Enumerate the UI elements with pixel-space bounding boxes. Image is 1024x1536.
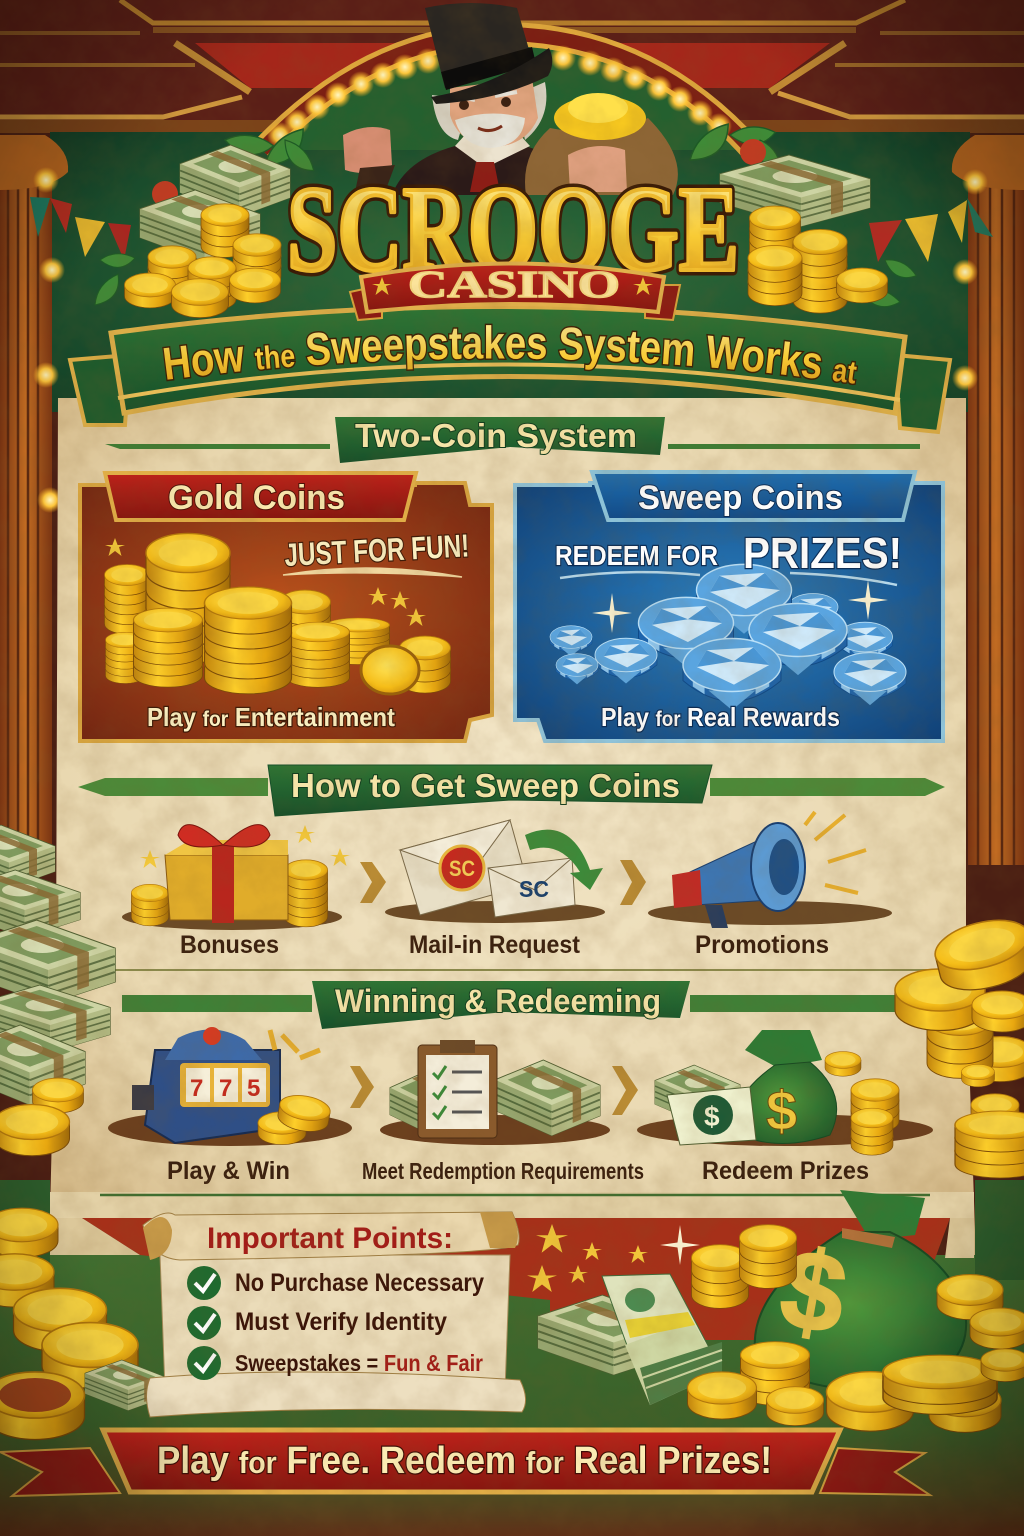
left cash pile: [0, 825, 115, 1105]
face: [450, 78, 538, 147]
right hand: [568, 146, 627, 192]
icon: megaphone: [648, 812, 892, 928]
header molding: [0, 0, 1024, 133]
icon: prize bag: $: [766, 1079, 797, 1142]
hat: [425, 3, 532, 88]
prizes text: PRIZES!: [743, 529, 902, 578]
left small coins: [0, 1078, 84, 1156]
panel: sweep coins: [515, 472, 943, 741]
sack of coins: [525, 118, 678, 195]
main heading banner: [68, 306, 952, 434]
item 2: Must Verify Identity: [235, 1308, 447, 1336]
icon: slot machine: 7: [190, 1075, 203, 1102]
check 2: [187, 1306, 221, 1340]
marquee arch: [262, 34, 752, 150]
label promotions: Promotions: [695, 931, 829, 959]
ribbon: [105, 473, 416, 520]
arrow 3: [350, 1066, 374, 1108]
icon: redemption clipboard: [380, 1040, 610, 1145]
title SCROOGE: SCROOGE: [287, 162, 739, 297]
coin piles: [104, 533, 450, 694]
red lower background: [0, 1180, 1024, 1536]
panel background: [80, 483, 492, 741]
hair: [432, 82, 546, 140]
right column: [952, 135, 1024, 865]
arrow 2: [620, 860, 646, 905]
money stack top left: [140, 145, 290, 261]
coat: [392, 146, 580, 195]
icon: slot machine: 5: [247, 1075, 260, 1102]
icon: mail-in envelopes: SC: [449, 856, 475, 881]
CASINO banner: CASINO: [408, 264, 620, 306]
icon: slot machine: [108, 1027, 352, 1146]
icon: bonuses gift: [122, 825, 350, 930]
label mail-in: Mail-in Request: [409, 931, 581, 959]
left fist: [343, 127, 392, 173]
icon: prize bag: [637, 1030, 933, 1155]
icon: mail-in envelopes: [385, 820, 605, 923]
lower right money bag: $: [772, 1225, 855, 1358]
foliage header: [88, 122, 917, 315]
panel background: [515, 483, 943, 741]
icon: prize bag: $: [704, 1101, 720, 1132]
label bonuses: Bonuses: [180, 931, 279, 959]
CASINO banner: [350, 264, 680, 320]
important points scroll: [143, 1212, 526, 1417]
coins top left: [124, 204, 281, 318]
tagline: JUST FOR FUN!: [283, 527, 470, 573]
main heading banner: How the Sweepstakes System Works at: [162, 324, 858, 386]
lower right coins: [688, 1275, 1024, 1432]
right coin pile: [895, 912, 1024, 1178]
left lower coin pile: [0, 1208, 165, 1440]
label requirements: Meet Redemption Requirements: [362, 1158, 644, 1184]
coins top right: [748, 206, 888, 313]
arrow 1: [360, 862, 386, 903]
lower coins behind bag: [692, 1225, 796, 1308]
title SCROOGE: SCROOGE: [287, 162, 739, 297]
check 3: [187, 1346, 221, 1380]
caption: Play for Entertainment: [147, 702, 395, 732]
icon: slot machine: 7: [219, 1075, 232, 1102]
label play win: Play & Win: [167, 1157, 290, 1185]
heading: Gold Coins: [168, 479, 345, 517]
bunting left: [30, 197, 131, 260]
panel: gold coins: [80, 473, 492, 741]
lower right money bag: [755, 1190, 966, 1390]
caption: Play for Real Rewards: [601, 702, 840, 732]
how to get ribbon: [78, 765, 945, 816]
parchment main panel: [49, 398, 976, 1258]
bunting right: [869, 198, 993, 262]
label redeem prizes: Redeem Prizes: [702, 1157, 869, 1185]
gem pile: [550, 564, 906, 710]
left column: [0, 135, 68, 865]
lower cash stack: [538, 1274, 722, 1405]
closing banner: [0, 1430, 930, 1496]
winning ribbon: [60, 970, 960, 1029]
ribbon: [592, 472, 915, 520]
how to get ribbon: How to Get Sweep Coins: [291, 767, 680, 804]
green stage background: [50, 132, 970, 412]
closing banner: Play for Free. Redeem for Real Prizes!: [157, 1440, 772, 1482]
money stack top right: [720, 155, 870, 226]
check 1: [187, 1266, 221, 1300]
winning ribbon: Winning & Redeeming: [335, 983, 661, 1019]
item 1: No Purchase Necessary: [235, 1269, 484, 1297]
stars red area: [527, 1224, 700, 1292]
arrow 4: [612, 1066, 638, 1115]
scroll heading: Important Points:: [207, 1222, 453, 1255]
redeem text: REDEEM FOR: [555, 540, 718, 571]
two-coin ribbon: Two-Coin System: [355, 417, 637, 454]
item 3: Sweepstakes = Fun & Fair: [235, 1350, 483, 1376]
icon: mail-in envelopes: SC: [519, 876, 549, 902]
two-coin ribbon: [105, 417, 920, 463]
scrooge character: [343, 3, 678, 195]
heading: Sweep Coins: [638, 479, 843, 517]
